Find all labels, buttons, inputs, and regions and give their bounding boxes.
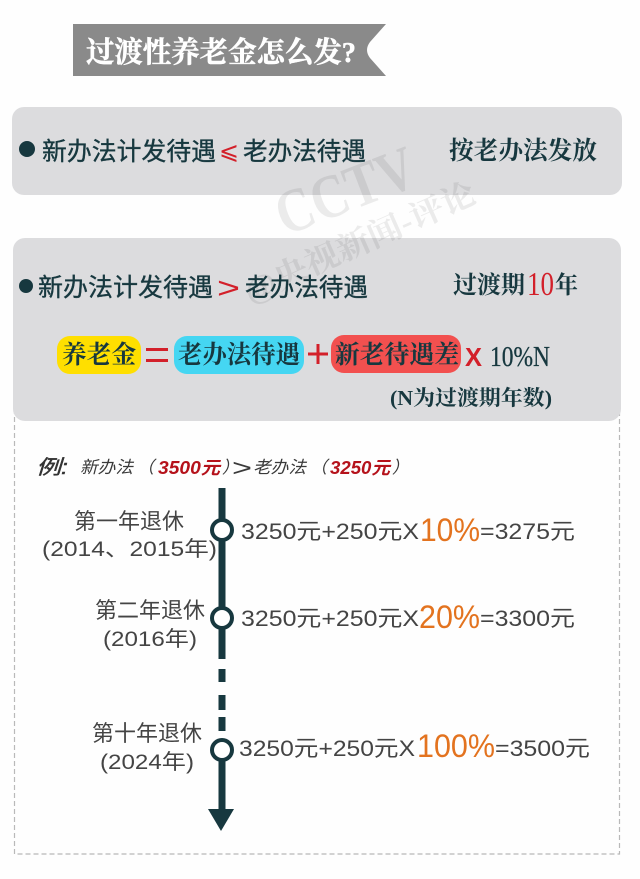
example heading: 老办法 [253,458,308,477]
formula: 10%N [490,342,550,373]
example heading: ） [222,458,239,477]
example heading: 3250元 [330,458,392,478]
row 3 calculation [239,728,590,764]
panel: new less than or equal to old: 按老办法发放 [449,136,597,165]
row 3 calculation: 3250元+250元X [239,736,415,761]
formula: X [465,342,483,372]
example heading: 新办法 [80,458,135,477]
formula [57,335,550,374]
row 3 label [92,721,202,774]
row 2 calculation [241,599,575,635]
dashed example frame [14,400,620,854]
row 3 label: 第十年退休 [92,721,202,746]
panel: new greater than old: 新办法计发待遇 [38,274,213,302]
transition period label: 过渡期 [453,272,525,299]
row 2 label: 第二年退休 [95,598,205,623]
example heading: （ [310,458,330,477]
formula: 新老待遇差 [335,341,459,369]
row 1 calculation: 3250元+250元X [241,519,419,544]
example heading: （ [137,458,157,477]
row 2 calculation: 3250元+250元X [241,606,419,631]
formula: 养老金 [62,341,136,369]
panel: new less than or equal to old: 老办法待遇 [243,138,366,166]
row 3 calculation: =3500元 [495,736,590,761]
example heading: > [232,455,252,482]
row 2 label: (2016年) [103,628,197,651]
timeline node 1 [212,520,232,540]
timeline node 2 [212,608,232,628]
panel: new less than or equal to old [12,107,622,195]
title banner: 过渡性养老金怎么发? [86,36,356,69]
transition period label: 年 [555,271,578,299]
example heading: ） [392,458,409,477]
row 1 label: (2014、2015年) [42,538,217,561]
transition period label: 10 [527,266,554,303]
row 1 calculation: =3275元 [480,519,575,544]
timeline node 3 [212,740,232,760]
row 1 label [42,509,217,561]
row 1 label: 第一年退休 [74,509,184,534]
panel: new less than or equal to old: ⩽ [219,137,239,165]
row 1 calculation [241,512,575,548]
row 2 label [95,598,205,651]
panel: new greater than old: 老办法待遇 [245,274,368,302]
panel: new greater than old: > [217,272,240,305]
formula: 老办法待遇 [178,341,300,369]
row 2 calculation: 20% [419,599,480,635]
panel: new less than or equal to old: 新办法计发待遇 [42,138,216,166]
watermark [238,134,481,309]
row 3 calculation: 100% [417,728,495,764]
formula note: (N为过渡期年数) [390,386,552,410]
title banner [73,24,386,76]
row 1 calculation: 10% [420,512,480,548]
panel: new greater than old [13,238,621,421]
example heading [36,455,409,482]
row 3 label: (2024年) [100,751,194,774]
example heading: 例: [36,457,68,479]
transition period label [453,266,578,303]
timeline arrow [208,488,234,831]
row 2 calculation: =3300元 [480,606,575,631]
example heading: 3500元 [158,458,222,478]
watermark: CCTV [266,134,426,249]
watermark: @央视新闻-评论 [238,175,481,309]
